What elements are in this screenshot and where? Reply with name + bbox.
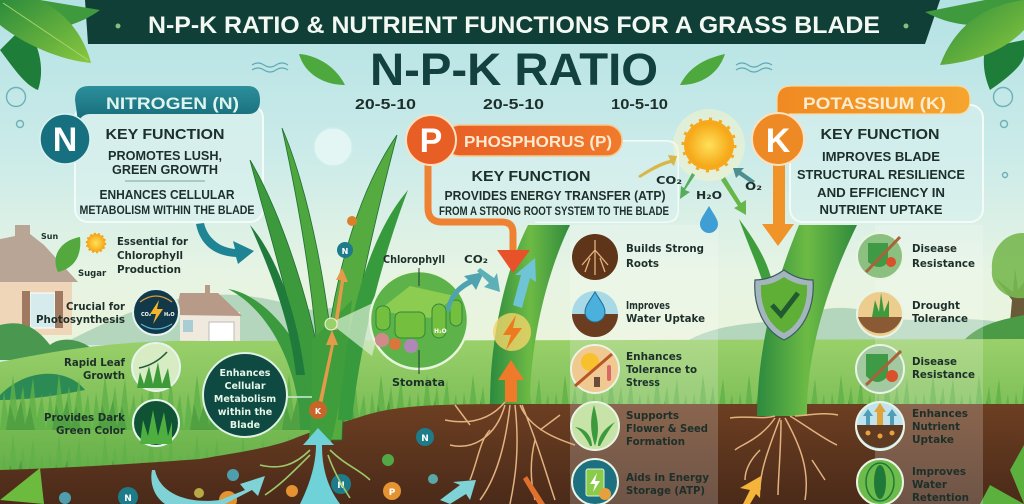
potassium key function: STRUCTURAL RESILIENCE [797,167,965,182]
icon: water drop [700,206,718,233]
phosphorus header label: PHOSPHORUS (P) [464,134,612,151]
callout: cellular metabolism: Enhances [220,368,271,379]
benefit: disease resistance top [857,233,975,279]
nutrient tokens: N [124,494,132,504]
flower patch [0,374,85,400]
benefit: photosynthesis: Photosynthesis [36,314,125,326]
icon: sun sugar leaf: Sugar [78,269,107,279]
benefit: water retention: Retention [912,492,969,504]
sun diagram: O₂ [745,180,762,193]
potassium side blade [739,219,772,290]
benefit: flower and seed: Flower & Seed [626,423,708,435]
benefit: water retention: Water [912,479,948,491]
phosphorus roots [445,402,575,504]
sun diagram [638,109,762,233]
nitrogen key function: ENHANCES CELLULAR [100,188,234,202]
benefit: drought tolerance: Tolerance [912,313,968,325]
farmhouse middle [176,285,242,342]
text: chlorophyll: Production [117,264,181,276]
nitrogen key function [80,126,255,217]
potassium badge [752,113,804,165]
sky background [0,0,1024,345]
nutrient tokens: K [315,407,322,416]
label: stomata: Stomata [392,377,445,389]
title: N-P-K RATIO & NUTRIENT FUNCTIONS FOR A GRASS BLADE [148,12,880,39]
energy bolt [493,313,531,351]
potassium header label: POTASSIUM (K) [803,94,946,113]
sun diagram: H₂O [696,189,722,202]
benefit: flower and seed: Supports [626,410,679,422]
benefit: energy storage: Storage (ATP) [626,485,705,497]
arrow: nutrient up stem [318,268,348,405]
benefit: water uptake: Improves [626,300,670,312]
farmhouse left [0,225,78,335]
panel: nitrogen [40,86,263,222]
icon: heading leaf right [680,54,725,85]
text: chlorophyll: Essential for [117,236,189,248]
benefit: stress tolerance: Tolerance to [626,364,697,376]
phosphorus key function [439,168,669,218]
benefit: stress tolerance: Enhances [626,351,682,363]
icon: sun sugar leaf: Sun [41,232,58,241]
top-left leaves [0,0,100,90]
arrow: blue up arrow [513,258,536,308]
benefit: rapid leaf growth [64,343,180,391]
benefit: disease resistance: Disease [912,356,957,368]
benefit: disease resistance: Resistance [912,369,975,381]
benefit: strong roots: Roots [626,258,659,270]
grass plant [228,128,408,445]
potassium roots [730,414,838,500]
potassium key function: IMPROVES BLADE [822,149,940,164]
benefit: drought tolerance [857,291,968,337]
potassium header [777,86,970,118]
nitrogen badge: N [53,121,77,159]
benefit: flower and seed [571,402,708,450]
heading: N-P-K ratio: N-P-K RATIO [370,44,658,95]
arrow: down right [721,177,746,215]
benefit: drought tolerance: Drought [912,300,960,312]
icon: sun sugar leaf [41,232,107,279]
benefit: nutrient uptake: Uptake [912,434,954,446]
nitrogen header label: NITROGEN (N) [106,94,239,113]
bubbles [6,88,1012,178]
nitrogen key function: METABOLISM WITHIN THE BLADE [80,205,255,217]
benefit: photosynthesis: CO₂ [141,312,151,318]
arrow: main nutrient arrow [300,428,340,504]
magnifier cell diagram: H₂O [434,328,447,335]
benefit: dark green color [44,400,179,446]
plant roots [260,450,370,498]
text: chlorophyll: Chlorophyll [117,250,183,262]
benefit: disease resistance top: Disease [912,243,957,255]
arrow: nitrogen to blade [196,223,254,264]
potassium key function: AND EFFICIENCY IN [817,185,945,200]
potassium key function: NUTRIENT UPTAKE [820,202,943,217]
soil layer [0,404,1024,504]
sun diagram: CO₂ [656,174,682,187]
callout: cellular metabolism: within the [218,407,272,418]
potassium key function: KEY FUNCTION [820,126,940,143]
text: chlorophyll [117,236,189,276]
label: CO2: CO₂ [464,254,488,266]
arrow: up energy arrow [498,360,524,402]
potassium badge: K [766,122,791,160]
top-right leaves [925,0,1024,90]
magnifier cell diagram [325,268,468,374]
nitrogen header [75,86,260,122]
potassium key function [797,126,965,217]
phosphorus key function: KEY FUNCTION [472,168,590,185]
ratio values: 10-5-10 [611,96,668,113]
benefit: water uptake: Water Uptake [626,313,705,325]
benefit: nutrient uptake [856,402,968,450]
benefit: stress tolerance: Stress [626,377,660,389]
benefit: disease resistance [856,345,975,393]
benefit: strong roots [572,234,704,280]
arrow: side nutrient arrows [151,470,476,504]
benefit: disease resistance top: Resistance [912,258,975,270]
benefit: water retention: Improves [912,466,966,478]
arrow: bottom orange [523,476,545,504]
nutrient tokens: N [342,247,348,256]
nitrogen key function: PROMOTES LUSH, [108,149,222,163]
benefit: photosynthesis: H₂O [164,312,175,318]
arrow: O2 [733,168,755,184]
nutrient tokens [59,216,438,504]
benefit: photosynthesis [36,289,179,335]
arrow: CO2 in [638,155,677,178]
grass tufts [0,370,1024,490]
phosphorus key function: PROVIDES ENERGY TRANSFER (ATP) [444,189,666,203]
callout: cellular metabolism [203,353,312,437]
arrowhead [497,250,530,273]
distant hills [60,295,1024,345]
nutrient tokens: P [389,488,396,498]
arrow: bottom yellow [740,476,761,504]
phosphorus key function: FROM A STRONG ROOT SYSTEM TO THE BLADE [439,206,669,218]
tree right [960,233,1024,350]
translucent column panels [570,225,983,504]
benefit: flower and seed: Formation [626,436,685,448]
benefit: stress tolerance [571,345,697,393]
potassium stem [757,225,857,416]
ratio values [355,96,668,113]
callout: cellular metabolism: Cellular [224,381,266,392]
phosphorus badge [406,115,456,165]
nutrient tokens: N [421,434,429,444]
nitrogen key function: KEY FUNCTION [106,126,224,143]
panel: potassium [752,86,983,246]
label: chlorophyll: Chlorophyll [383,254,445,266]
benefit: strong roots: Builds Strong [626,243,704,255]
benefit: water uptake [572,291,705,337]
bushes left [0,323,95,360]
benefit: rapid leaf growth: Rapid Leaf [64,357,125,369]
benefit: nutrient uptake: Nutrient [912,421,960,433]
nitrogen badge [40,114,90,164]
benefit: energy storage: Aids in Energy [626,472,709,484]
phosphorus stem [490,225,570,404]
ratio values: 20-5-10 [483,96,544,113]
nitrogen key function: GREEN GROWTH [112,163,218,177]
icon: waves right [736,63,772,72]
arrow: potassium down [762,165,794,246]
callout: cellular metabolism: Blade [230,420,260,431]
icon: heading leaf left [299,54,345,85]
icon: shield [755,270,813,340]
phosphorus header [445,125,622,156]
benefit: energy storage [572,459,709,504]
benefit: photosynthesis: Crucial for [66,301,126,313]
benefit: dark green color: Green Color [56,425,126,437]
phosphorus bracket arrow [428,165,513,255]
title bar [85,0,940,44]
green field [0,339,1024,490]
benefit: rapid leaf growth: Growth [83,370,125,382]
arrow: down left [680,173,695,199]
phosphorus badge: P [420,122,442,160]
arrow: CO2 out [446,272,484,312]
arrow: CO2 in [477,268,500,292]
nutrient tokens: N [337,481,345,491]
icon: waves left [252,63,288,72]
panel: phosphorus [406,115,678,273]
ratio values: 20-5-10 [355,96,416,113]
benefit: dark green color: Provides Dark [44,412,126,424]
benefit: nutrient uptake: Enhances [912,408,968,420]
benefit: water retention [857,459,969,504]
callout: cellular metabolism: Metabolism [214,394,276,405]
